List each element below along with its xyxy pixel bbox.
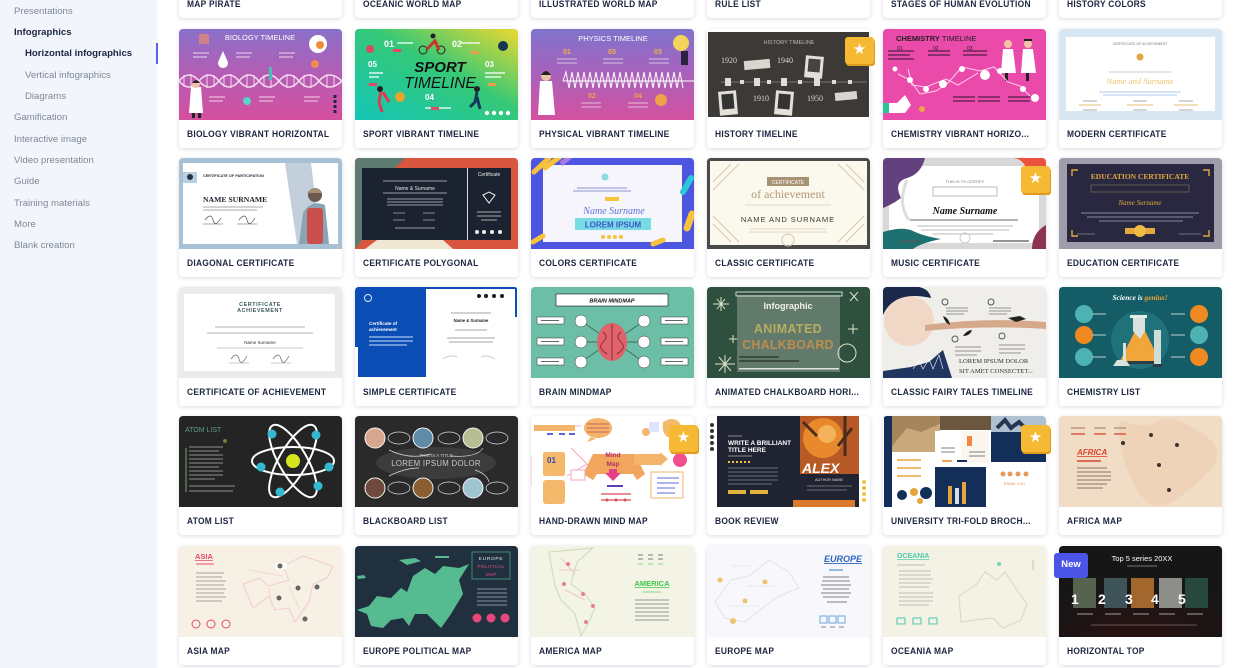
card: sport vibrant timeline xyxy=(355,29,518,148)
card: sport vibrant timeline: SPORT xyxy=(414,59,468,76)
sidebar navigation: Presentations xyxy=(14,6,73,17)
card: sport vibrant timeline: TIMELINE xyxy=(404,75,476,92)
card: europe political map: MAP xyxy=(486,572,496,578)
sidebar navigation: Gamification xyxy=(14,112,67,123)
card: horizontal top: 3 xyxy=(1125,591,1133,607)
card: modern certificate xyxy=(1059,29,1222,148)
card: horizontal top: Top 5 series 20XX xyxy=(1112,554,1172,563)
card: asia map: ASIA MAP xyxy=(187,646,230,656)
card: history timeline: HISTORY TIMELINE xyxy=(715,129,798,139)
card: physical vibrant timeline: PHYSICAL VIBRANT TIMELINE xyxy=(539,129,669,139)
card: classic certificate: of achievement xyxy=(751,187,825,201)
card: diagonal certificate: NAME SURNAME xyxy=(203,195,267,204)
badge: premium star history timeline: ★ xyxy=(853,41,866,58)
card: horizontal top: 4 xyxy=(1151,591,1159,607)
card: book review: TITLE HERE xyxy=(728,447,767,454)
top row card: history colors xyxy=(1059,0,1222,18)
card: history timeline xyxy=(707,29,870,148)
card: modern certificate: Name and Surname xyxy=(1105,76,1174,86)
badge: new xyxy=(1054,553,1088,578)
card: sport vibrant timeline: 02 xyxy=(452,39,462,49)
card: diagonal certificate: DIAGONAL CERTIFICATE xyxy=(187,258,294,268)
card: physical vibrant timeline: 02 xyxy=(588,93,596,100)
card: biology vibrant horizontal xyxy=(179,29,342,148)
active menu indicator xyxy=(156,43,158,64)
card: book review: AUTHOR NAME xyxy=(815,478,844,482)
sidebar navigation: Video presentation xyxy=(14,155,94,166)
card: africa map xyxy=(1059,416,1222,535)
card: europe political map: POLITICAL xyxy=(477,564,505,570)
card: history timeline: 1910 xyxy=(753,94,769,103)
card: certificate polygonal: Certificate xyxy=(478,172,500,178)
card: classic fairy tales timeline: CLASSIC FAIRY TALES TIMELINE xyxy=(891,387,1033,397)
badge: premium star music certificate xyxy=(1021,166,1050,193)
card: horizontal top: 1 xyxy=(1071,591,1079,607)
card: biology vibrant horizontal: BIOLOGY TIMELINE xyxy=(225,33,295,42)
card: chemistry list: Science is genius! xyxy=(1112,293,1168,302)
badge: premium star history timeline xyxy=(845,37,874,64)
card: colors certificate: LOREM IPSUM xyxy=(585,220,642,230)
card: book review: BOOK REVIEW xyxy=(715,516,779,526)
badge: new: New xyxy=(1061,559,1081,570)
card: classic certificate: NAME AND SURNAME xyxy=(741,215,835,224)
card: europe map: EUROPE xyxy=(824,554,863,564)
top row card: map pirate xyxy=(179,0,342,18)
card: hand-drawn mind map: 01 xyxy=(547,456,556,465)
card: horizontal top: 2 xyxy=(1098,591,1106,607)
card: atom list: ATOM LIST xyxy=(185,427,222,434)
sidebar navigation: Guide xyxy=(14,176,40,187)
sidebar navigation: Interactive image xyxy=(14,134,87,145)
card: physical vibrant timeline xyxy=(531,29,694,148)
card: blackboard list: BLACKBOARD LIST xyxy=(363,516,448,526)
card: hand-drawn mind map: Mind xyxy=(605,452,621,459)
card: book review: WRITE A BRILLIANT xyxy=(728,440,791,447)
card: sport vibrant timeline: 03 xyxy=(485,60,494,69)
card: chemistry vibrant horizontal: CHEMISTRY TIMELINE xyxy=(896,34,976,43)
sidebar navigation: Diagrams xyxy=(25,91,66,102)
top row card: oceanic world map xyxy=(355,0,518,18)
card: university tri-fold brochure xyxy=(883,416,1046,535)
card: hand-drawn mind map: Map xyxy=(606,461,620,468)
card: simple certificate: Certificate of xyxy=(369,321,398,326)
card: asia map: ASIA xyxy=(195,552,214,561)
card: sport vibrant timeline: 05 xyxy=(368,60,377,69)
card: modern certificate: CERTIFICATE OF ACHIEVEMENT xyxy=(1113,42,1168,46)
card: physical vibrant timeline: PHYSICS TIMELINE xyxy=(578,34,648,43)
card: blackboard list xyxy=(355,416,518,535)
card: europe map xyxy=(707,546,870,665)
card: diagonal certificate: CERTIFICATE OF PARTICIPATION xyxy=(203,174,264,178)
card: sport vibrant timeline: 04 xyxy=(425,93,434,102)
card: animated chalkboard horizontal: CHALKBOARD xyxy=(742,338,834,352)
card: education certificate xyxy=(1059,158,1222,277)
card: africa map: AFRICA MAP xyxy=(1067,516,1122,526)
card: america map: AMERICA xyxy=(634,579,670,588)
card: music certificate: THIS IS TO CERTIFY xyxy=(946,179,985,184)
card: chemistry vibrant horizontal: 02 xyxy=(933,46,939,52)
card: music certificate xyxy=(883,158,1046,277)
card: chemistry vibrant horizontal: 01 xyxy=(897,46,903,52)
card: asia map xyxy=(179,546,342,665)
card: diagonal certificate xyxy=(179,158,342,277)
card: animated chalkboard horizontal: ANIMATED CHALKBOARD HORI... xyxy=(715,387,859,397)
card: education certificate: EDUCATION CERTIFICATE xyxy=(1091,172,1189,181)
card: brain mindmap: BRAIN MINDMAP xyxy=(539,387,612,397)
card: africa map: AFRICA xyxy=(1076,448,1107,457)
card: classic fairy tales timeline xyxy=(883,287,1046,406)
card: hand-drawn mind map xyxy=(531,416,694,535)
card: university tri-fold brochure: UNIVERSITY TRI-FOLD BROCH... xyxy=(891,516,1031,526)
card: brain mindmap xyxy=(531,287,694,406)
card: oceania map: OCEANIA MAP xyxy=(891,646,953,656)
top row card: rule list xyxy=(707,0,870,18)
card: book review xyxy=(707,416,870,535)
sidebar navigation: Infographics xyxy=(14,27,72,38)
card: physical vibrant timeline: 01 xyxy=(563,49,571,56)
card: chemistry vibrant horizontal: 03 xyxy=(967,46,973,52)
top row card: illustrated world map xyxy=(531,0,694,18)
sidebar navigation: Vertical infographics xyxy=(25,70,111,81)
card: certificate of achievement: Name Surname xyxy=(244,340,276,345)
card: chemistry vibrant horizontal xyxy=(883,29,1046,148)
card: classic certificate: CERTIFICATE xyxy=(772,180,805,186)
card: education certificate: Name Surname xyxy=(1118,199,1161,207)
card: certificate polygonal: Name & Surname xyxy=(395,186,435,192)
badge: premium star hand-drawn mind map xyxy=(669,425,698,452)
card: physical vibrant timeline: 03 xyxy=(654,49,662,56)
card: history timeline: 1920 xyxy=(721,56,737,65)
card: classic fairy tales timeline: SIT AMET CONSECTET... xyxy=(959,368,1033,375)
sidebar navigation: Blank creation xyxy=(14,240,75,251)
card: chemistry vibrant horizontal: CHEMISTRY VIBRANT HORIZO... xyxy=(891,129,1029,139)
card: simple certificate: Name & Surname xyxy=(454,318,489,323)
card: blackboard list: THIS IS A TITLE xyxy=(420,453,452,458)
sidebar navigation xyxy=(0,0,157,668)
card: oceania map: OCEANIA xyxy=(897,553,929,560)
card: hand-drawn mind map: HAND-DRAWN MIND MAP xyxy=(539,516,648,526)
top row card: stages of human evolution xyxy=(883,0,1046,18)
badge: premium star hand-drawn mind map: ★ xyxy=(677,429,690,446)
card: history timeline: 1950 xyxy=(807,94,823,103)
card: history timeline: HISTORY TIMELINE xyxy=(764,40,815,46)
card: certificate of achievement xyxy=(179,287,342,406)
card: oceania map xyxy=(883,546,1046,665)
card: biology vibrant horizontal: BIOLOGY VIBRANT HORIZONTAL xyxy=(187,129,329,139)
card: brain mindmap: BRAIN MINDMAP xyxy=(589,298,635,304)
card: europe political map: EUROPE xyxy=(479,556,503,562)
sidebar navigation: Horizontal infographics xyxy=(25,48,132,59)
badge: premium star university brochure xyxy=(1021,425,1050,452)
card: certificate polygonal xyxy=(355,158,518,277)
sidebar navigation: More xyxy=(14,219,36,230)
badge: premium star music certificate: ★ xyxy=(1029,170,1042,187)
card: physical vibrant timeline: 03 xyxy=(608,49,616,56)
card: simple certificate xyxy=(355,287,518,406)
card: modern certificate: MODERN CERTIFICATE xyxy=(1067,129,1167,139)
card: europe political map xyxy=(355,546,518,665)
sidebar navigation: Training materials xyxy=(14,198,90,209)
badge: premium star university brochure: ★ xyxy=(1029,429,1042,446)
card: sport vibrant timeline: 01 xyxy=(384,39,394,49)
card: classic fairy tales timeline: LOREM IPSUM DOLOR xyxy=(959,358,1029,365)
card: atom list xyxy=(179,416,342,535)
card: history timeline: 1940 xyxy=(777,56,793,65)
card: simple certificate: SIMPLE CERTIFICATE xyxy=(363,387,457,397)
card: america map: AMERICA MAP xyxy=(539,646,602,656)
card: horizontal top: HORIZONTAL TOP xyxy=(1067,646,1145,656)
card: certificate of achievement: ACHIEVEMENT xyxy=(237,308,283,314)
card: music certificate: Name Surname xyxy=(932,206,998,217)
card: atom list: ATOM LIST xyxy=(187,516,234,526)
card: education certificate: EDUCATION CERTIFICATE xyxy=(1067,258,1179,268)
card: chemistry list: CHEMISTRY LIST xyxy=(1067,387,1140,397)
card: blackboard list: LOREM IPSUM DOLOR xyxy=(391,459,481,468)
card: europe political map: EUROPE POLITICAL MAP xyxy=(363,646,472,656)
card: europe map: EUROPE MAP xyxy=(715,646,774,656)
card: colors certificate: Name Surname xyxy=(582,206,645,217)
card: animated chalkboard horizontal xyxy=(707,287,870,406)
card: certificate of achievement: CERTIFICATE xyxy=(239,302,281,308)
card: colors certificate xyxy=(531,158,694,277)
card: simple certificate: achievement xyxy=(369,327,397,332)
card: certificate of achievement: CERTIFICATE OF ACHIEVEMENT xyxy=(187,387,326,397)
card: horizontal top: 5 xyxy=(1178,591,1186,607)
card: classic certificate: CLASSIC CERTIFICATE xyxy=(715,258,814,268)
card: classic certificate xyxy=(707,158,870,277)
card: animated chalkboard horizontal: Infographic xyxy=(764,301,812,311)
card: book review: ALEX xyxy=(801,460,841,476)
card: university tri-fold brochure: THANK YOU xyxy=(1003,482,1025,486)
card: certificate polygonal: CERTIFICATE POLYGONAL xyxy=(363,258,479,268)
card: horizontal top xyxy=(1059,546,1222,665)
card: physical vibrant timeline: 04 xyxy=(634,93,642,100)
card: sport vibrant timeline: SPORT VIBRANT TIMELINE xyxy=(363,129,479,139)
card: colors certificate: COLORS CERTIFICATE xyxy=(539,258,637,268)
card: music certificate: MUSIC CERTIFICATE xyxy=(891,258,980,268)
card: chemistry list xyxy=(1059,287,1222,406)
card: animated chalkboard horizontal: ANIMATED xyxy=(754,322,822,336)
card: america map xyxy=(531,546,694,665)
